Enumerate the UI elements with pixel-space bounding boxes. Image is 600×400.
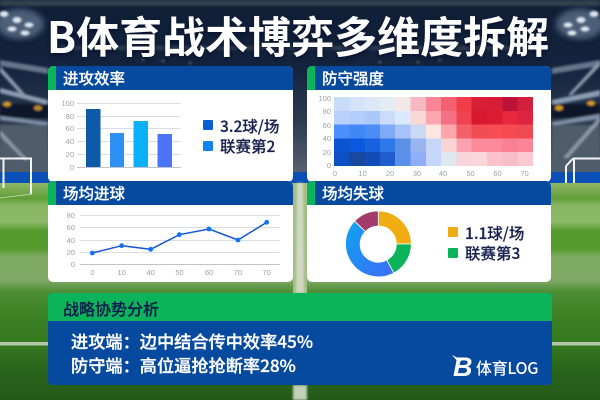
heading: defensive strength — [307, 66, 551, 90]
heatmap: 20 — [323, 148, 331, 157]
bar chart: 60 — [66, 124, 74, 133]
heading: defensive strength: 防守强度 — [322, 67, 384, 89]
heading: goals conceded — [307, 181, 551, 205]
legend: goals per match — [203, 115, 279, 157]
bar chart: 0 — [70, 163, 74, 172]
heatmap: 70 — [520, 169, 529, 178]
bar chart: 100 — [61, 99, 74, 108]
line chart: 40 — [147, 268, 155, 277]
heading: goals per match — [48, 181, 293, 205]
heading: strategic analysis: 战略协势分析 — [63, 296, 159, 320]
heatmap: 0 — [333, 169, 337, 178]
heatmap — [318, 94, 533, 178]
logo: B体育LOG: 体育LOG — [476, 355, 538, 379]
text: attack and defense analysis — [71, 328, 313, 377]
heading: goals conceded: 场均失球 — [322, 182, 384, 204]
legend: goals conceded: 1.1球/场 — [465, 222, 524, 244]
donut chart — [346, 212, 411, 276]
heatmap: 0 — [327, 161, 331, 170]
heading: goals per match: 场均进球 — [63, 182, 125, 204]
line chart: 70 — [263, 268, 271, 277]
text: attack and defense analysis: 防守端：高位逼抢抢断率28% — [71, 352, 296, 377]
heatmap: 40 — [439, 169, 447, 178]
heatmap: 50 — [466, 169, 475, 178]
line chart: 50 — [175, 268, 184, 277]
line chart: 60 — [67, 223, 75, 232]
legend: goals per match: 联赛第2 — [220, 135, 275, 157]
legend: goals conceded: 联赛第3 — [465, 242, 520, 264]
line chart: 40 — [67, 236, 75, 245]
heading: attack efficiency: 进攻效率 — [63, 67, 125, 89]
bar chart: 20 — [66, 150, 74, 159]
logo: B体育LOG — [452, 353, 538, 379]
heatmap: 80 — [323, 107, 331, 116]
line chart: 70 — [234, 268, 242, 277]
heatmap: 40 — [323, 134, 331, 143]
text: attack and defense analysis: 进攻端：边中结合传中效率45% — [71, 328, 313, 353]
heatmap: 60 — [323, 121, 331, 130]
line chart: 10 — [118, 268, 126, 277]
line chart: 0 — [71, 260, 75, 269]
panel: attack efficiency — [48, 66, 293, 182]
line chart: 0 — [90, 268, 95, 277]
panel: goals per match — [48, 181, 293, 282]
heatmap: 10 — [358, 169, 367, 178]
heatmap: 30 — [413, 169, 421, 178]
panel: goals conceded — [307, 181, 551, 282]
heatmap: 100 — [318, 94, 331, 103]
bar chart: 80 — [66, 112, 74, 121]
line chart: 80 — [67, 211, 75, 220]
legend: goals per match: 3.2球/场 — [220, 115, 279, 137]
panel: defensive strength — [307, 66, 551, 182]
legend: goals conceded — [448, 222, 524, 264]
line chart: 60 — [205, 268, 213, 277]
heatmap: 60 — [493, 169, 502, 178]
heading: strategic analysis — [48, 293, 552, 321]
bar chart: 40 — [66, 137, 74, 146]
heatmap: 20 — [386, 169, 394, 178]
heading: attack efficiency — [48, 66, 293, 90]
line chart: 20 — [67, 248, 75, 257]
panel: strategic analysis — [48, 293, 552, 385]
title: B体育战术博弈多维度拆解 — [47, 4, 549, 66]
bar chart — [61, 99, 181, 172]
line chart — [66, 211, 280, 277]
